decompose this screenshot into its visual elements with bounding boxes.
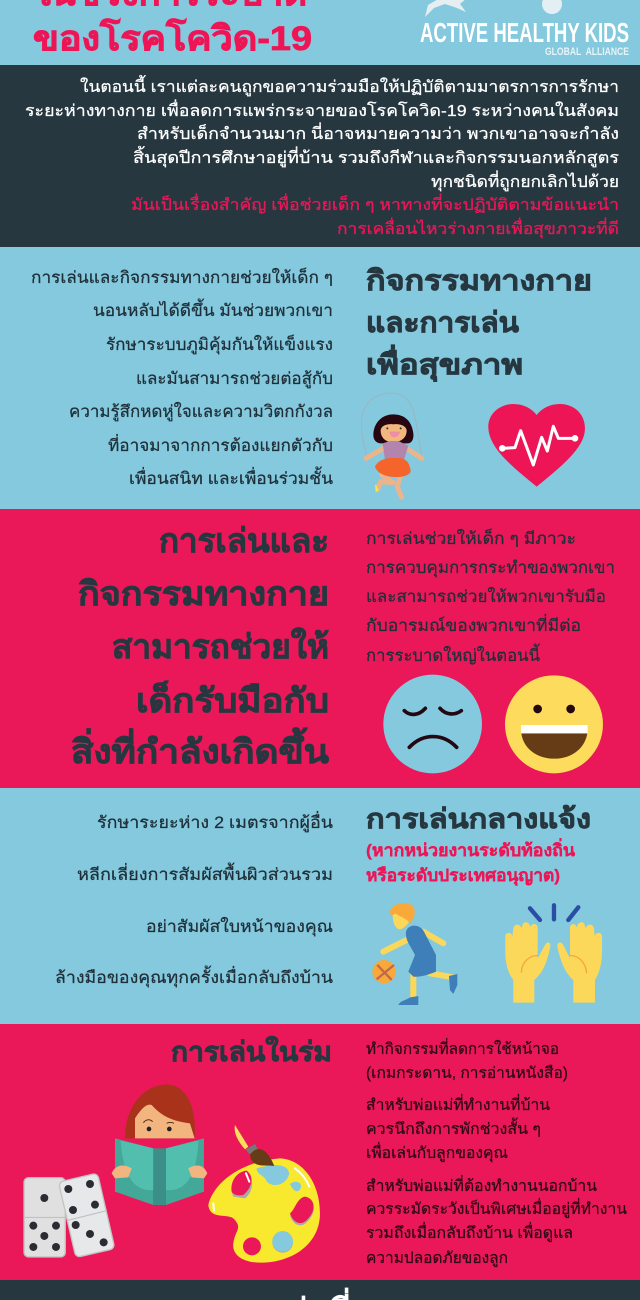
safety tips: รักษาระยะห่าง 2 เมตรจากผู้อื่น <box>97 811 333 833</box>
panel: outdoor play <box>0 788 640 1024</box>
intro text <box>25 75 619 192</box>
icon: happy face <box>505 675 603 773</box>
panel: indoor play <box>0 1024 640 1280</box>
intro highlight text <box>131 193 619 239</box>
safety tips: หลีกเลี่ยงการสัมผัสพื้นผิวส่วนรวม <box>77 862 333 884</box>
tips text: (เกมกระดาน, การอ่านหนังสือ) <box>366 1064 568 1082</box>
icon: sad face <box>383 675 482 773</box>
heading: เพื่อสุขภาพ <box>366 344 523 382</box>
heading <box>366 265 592 382</box>
icon: heart with pulse <box>488 404 585 487</box>
heading: สิ่งที่กำลังเกิดขึ้น <box>71 727 329 770</box>
sub-heading <box>366 838 575 886</box>
panel: physical activity for health <box>0 247 640 509</box>
icon: child dribbling basketball <box>372 903 457 1005</box>
body text: การควบคุมการกระทำของพวกเขา <box>366 559 615 578</box>
body text: นอนหลับได้ดีขึ้น มันช่วยพวกเขา <box>93 298 333 320</box>
icon: girl skipping rope <box>361 393 422 497</box>
body text: การเล่นและกิจกรรมทางกายช่วยให้เด็ก ๆ <box>31 267 333 287</box>
body text <box>31 267 333 488</box>
body text: กับอารมณ์ของพวกเขาที่มีต่อ <box>366 614 581 635</box>
body text: รักษาระบบภูมิคุ้มกันให้แข็งแรง <box>106 334 333 355</box>
sub-heading: (หากหน่วยงานระดับท้องถิ่น <box>366 838 575 860</box>
heading: เด็กรับมือกับ <box>136 680 329 719</box>
intro text: ทุกชนิดที่ถูกยกเลิกไปด้วย <box>431 170 619 192</box>
logo: Active Healthy Kids Global Alliance <box>420 0 629 58</box>
intro text: สิ้นสุดปีการศึกษาอยู่ที่บ้าน รวมถึงกีฬาและกิจกรรมนอกหลักสูตร <box>133 146 619 168</box>
heading: การเล่นกลางแจ้ง <box>366 804 591 834</box>
heading <box>71 522 329 770</box>
icon: child reading book <box>112 1084 207 1205</box>
title: ของโรคโควิด-19 <box>33 18 312 58</box>
sub-heading: หรือระดับประเทศอนุญาต) <box>366 865 560 886</box>
title <box>33 0 312 58</box>
body text: และมันสามารถช่วยต่อสู้กับ <box>136 370 333 389</box>
body text: ความรู้สึกหดหู่ใจและความวิตกกังวล <box>69 402 333 422</box>
heading: การเล่นในร่ม <box>171 1036 332 1067</box>
body text: การเล่นช่วยให้เด็ก ๆ มีภาวะ <box>366 528 576 548</box>
tips text: รวมถึงเมื่อกลับถึงบ้าน เพื่อดูแล <box>366 1222 573 1243</box>
body text <box>366 528 615 665</box>
icon: dominoes <box>24 1173 115 1257</box>
panel: footer <box>0 1280 640 1300</box>
tips text <box>366 1038 627 1268</box>
safety tips: ล้างมือของคุณทุกครั้งเมื่อกลับถึงบ้าน <box>55 965 333 988</box>
safety tips <box>55 811 333 988</box>
intro text: สำหรับเด็กจำนวนมาก นี่อาจหมายความว่า พวกเขาอาจจะกำลัง <box>137 122 619 143</box>
tips text: ความปลอดภัยของลูก <box>366 1250 508 1268</box>
panel: header <box>0 0 640 65</box>
body text: ที่อาจมาจากการต้องแยกตัวกับ <box>108 434 333 455</box>
heading: กิจกรรมทางกาย <box>366 265 592 296</box>
panel: coping with what is happening <box>0 509 640 788</box>
tips text: ทำกิจกรรมที่ลดการใช้หน้าจอ <box>366 1038 559 1058</box>
panel: introduction <box>0 65 640 247</box>
intro text: ระยะห่างทางกาย เพื่อลดการแพร่กระจายของโรคโควิด-19 ระหว่างคนในสังคม <box>25 99 619 120</box>
intro highlight text: มันเป็นเรื่องสำคัญ เพื่อช่วยเด็ก ๆ หาทางที่จะปฏิบัติตามข้อแนะนำ <box>131 193 619 214</box>
tips text: สำหรับพ่อแม่ที่ต้องทำงานนอกบ้าน <box>366 1175 597 1195</box>
icon: raised hands <box>505 905 602 1003</box>
heading: สามารถช่วยให้ <box>112 627 329 665</box>
tips text: ควรนึกถึงการพักช่วงสั้น ๆ <box>366 1117 541 1138</box>
tips text: ควรระมัดระวังเป็นพิเศษเมื่ออยู่ที่ทำงาน <box>366 1198 627 1219</box>
intro text: ในตอนนี้ เราแต่ละคนถูกขอความร่วมมือให้ปฏิบัติตามมาตรการการรักษา <box>80 75 619 97</box>
tips text: เพื่อเล่นกับลูกของคุณ <box>366 1142 508 1163</box>
body text: เพื่อนสนิท และเพื่อนร่วมชั้น <box>129 466 333 488</box>
safety tips: อย่าสัมผัสใบหน้าของคุณ <box>146 917 333 937</box>
heading: การเล่นและ <box>159 522 329 559</box>
tips text: สำหรับพ่อแม่ที่ทำงานที่บ้าน <box>366 1094 550 1114</box>
icon: paint palette and brush <box>208 1125 320 1263</box>
heading: กิจกรรมทางกาย <box>78 575 329 612</box>
body text: และสามารถช่วยให้พวกเขารับมือ <box>366 587 606 606</box>
body text: การระบาดใหญ่ในตอนนี้ <box>366 643 540 665</box>
heading: และการเล่น <box>366 307 519 338</box>
intro highlight text: การเคลื่อนไหวร่างกายเพื่อสุขภาวะที่ดี <box>337 217 619 239</box>
